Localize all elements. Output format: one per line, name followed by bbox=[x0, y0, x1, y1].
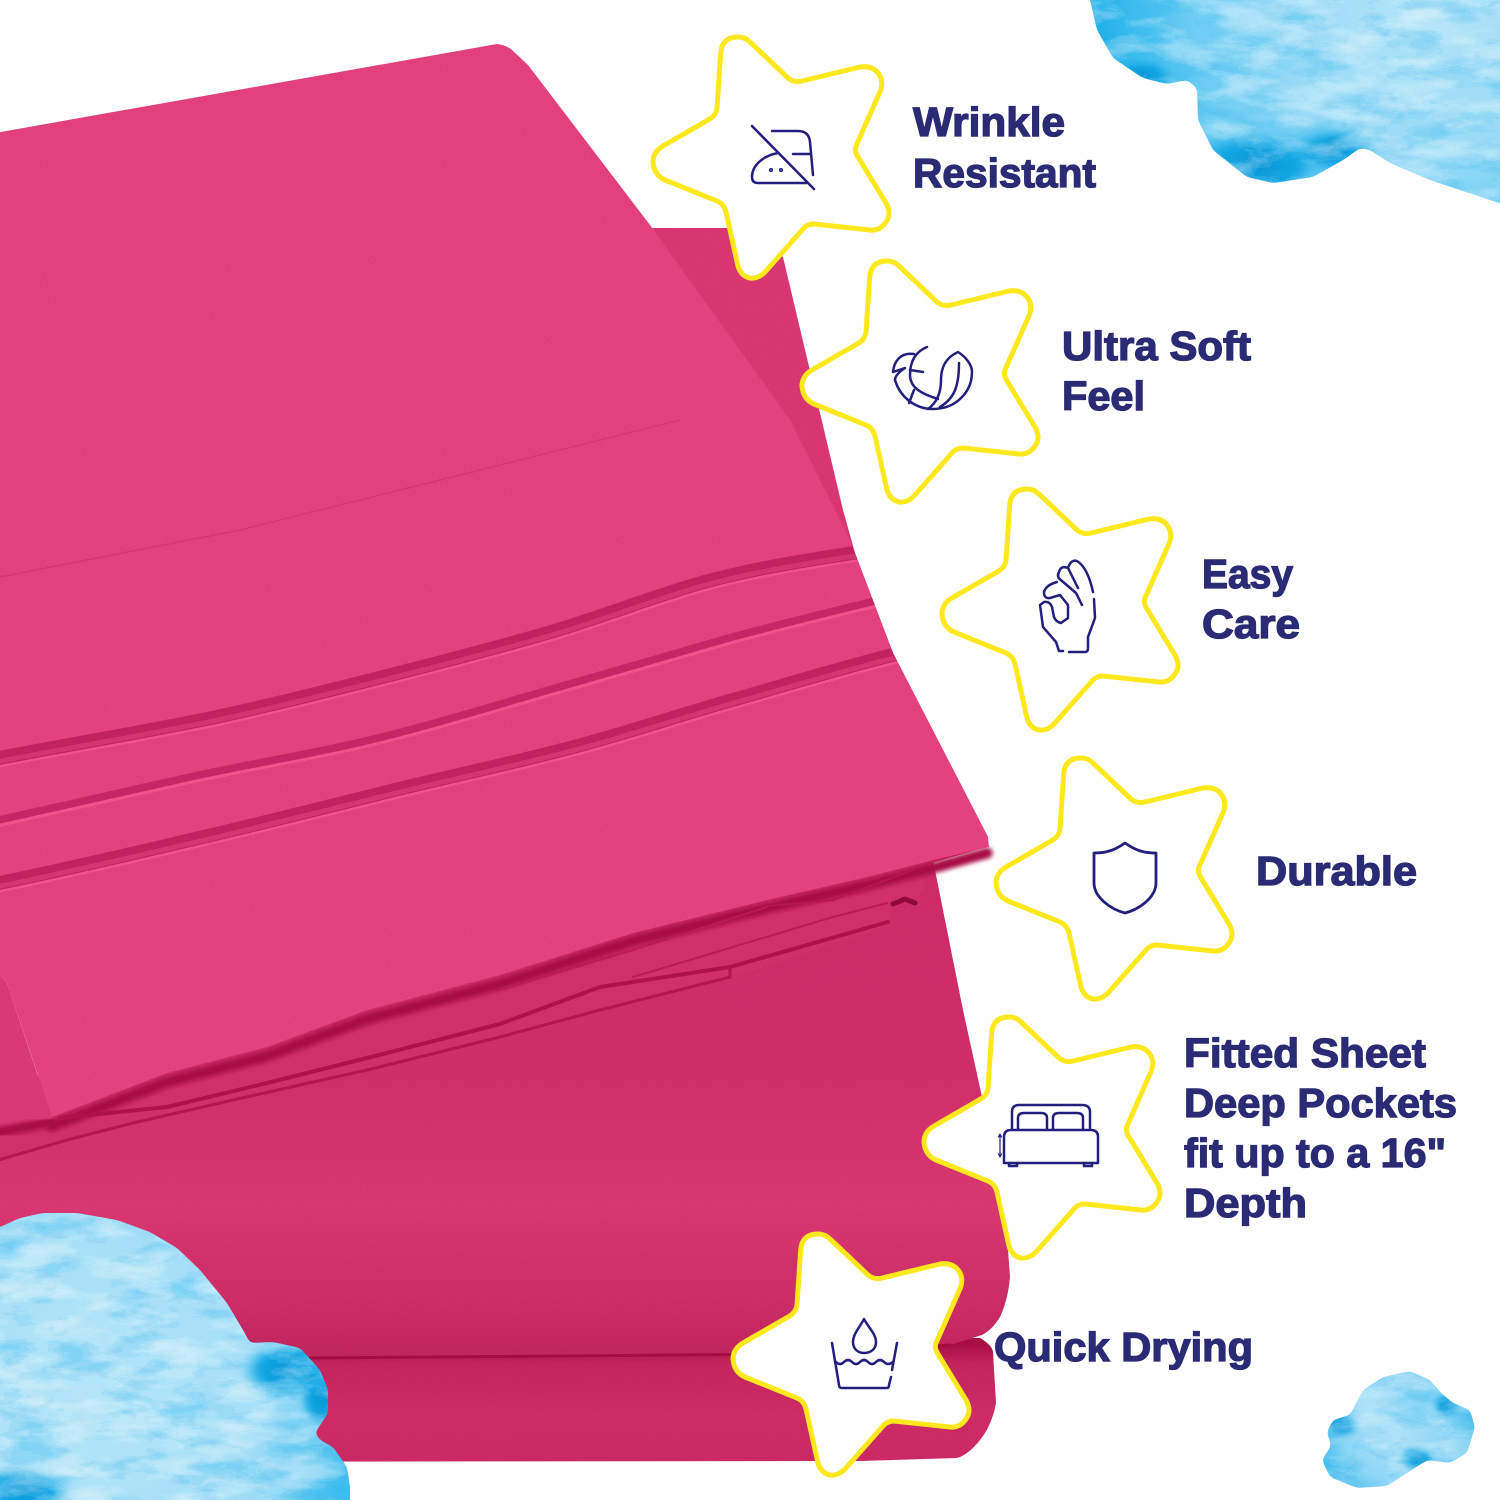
icon: crossed-out iron bbox=[752, 126, 814, 189]
label: Easy bbox=[1202, 551, 1293, 597]
label: Fitted Sheet bbox=[1184, 1030, 1426, 1076]
pillow fold layers under the cuff bbox=[0, 840, 987, 1162]
label line 2: Care bbox=[1202, 601, 1300, 647]
icon: OK hand bbox=[1040, 561, 1095, 652]
star badge bbox=[733, 1234, 969, 1475]
star badge bbox=[653, 37, 889, 278]
rear pillowcase strip bbox=[652, 228, 988, 870]
fold shadow lines bbox=[0, 853, 987, 1358]
cloud: top right bbox=[1085, 0, 1500, 210]
feature: ultra soft feel bbox=[802, 261, 1251, 502]
label line 2: Feel bbox=[1062, 373, 1145, 419]
feature: fitted sheet deep pockets bbox=[924, 1017, 1457, 1258]
icon: shield bbox=[1094, 843, 1156, 913]
left pillow side panel bbox=[0, 968, 52, 1128]
label: Wrinkle bbox=[913, 99, 1065, 145]
star badge bbox=[996, 758, 1232, 999]
label line 2: Resistant bbox=[913, 150, 1096, 196]
icon: feather and leaf bbox=[893, 347, 972, 409]
icon: water drop in basin bbox=[832, 1319, 897, 1388]
star badge bbox=[942, 489, 1178, 730]
icon: bed with depth arrow bbox=[998, 1105, 1098, 1166]
star badge bbox=[802, 261, 1038, 502]
embroidered stripe 2 bbox=[0, 600, 881, 826]
embroidered stripe 1 bbox=[0, 552, 861, 767]
embroidered stripe 3 bbox=[0, 652, 906, 892]
feature: wrinkle resistant bbox=[653, 37, 1096, 278]
label line 2: Deep Pockets bbox=[1184, 1080, 1457, 1126]
feature: quick drying bbox=[733, 1234, 1253, 1475]
label: Durable bbox=[1256, 848, 1417, 894]
top pillowcase bbox=[0, 44, 989, 1117]
label: Ultra Soft bbox=[1062, 323, 1251, 369]
label line 3: fit up to a 16" bbox=[1184, 1130, 1446, 1176]
cloud: small bottom right bbox=[1320, 1371, 1475, 1488]
pillow details: seam and embroidery bbox=[0, 420, 906, 892]
star badge bbox=[924, 1017, 1160, 1258]
feature: easy care bbox=[942, 489, 1300, 730]
pillow seam bbox=[0, 420, 680, 578]
label: Quick Drying bbox=[994, 1324, 1253, 1370]
feature: durable bbox=[996, 758, 1417, 999]
bedding: folded pink sheet set bbox=[0, 44, 1010, 1462]
main folded flat sheet bbox=[0, 856, 1010, 1360]
cloud: bottom left bbox=[0, 1213, 350, 1500]
label line 4: Depth bbox=[1184, 1180, 1307, 1226]
bottom sheet layer bbox=[0, 1338, 996, 1462]
